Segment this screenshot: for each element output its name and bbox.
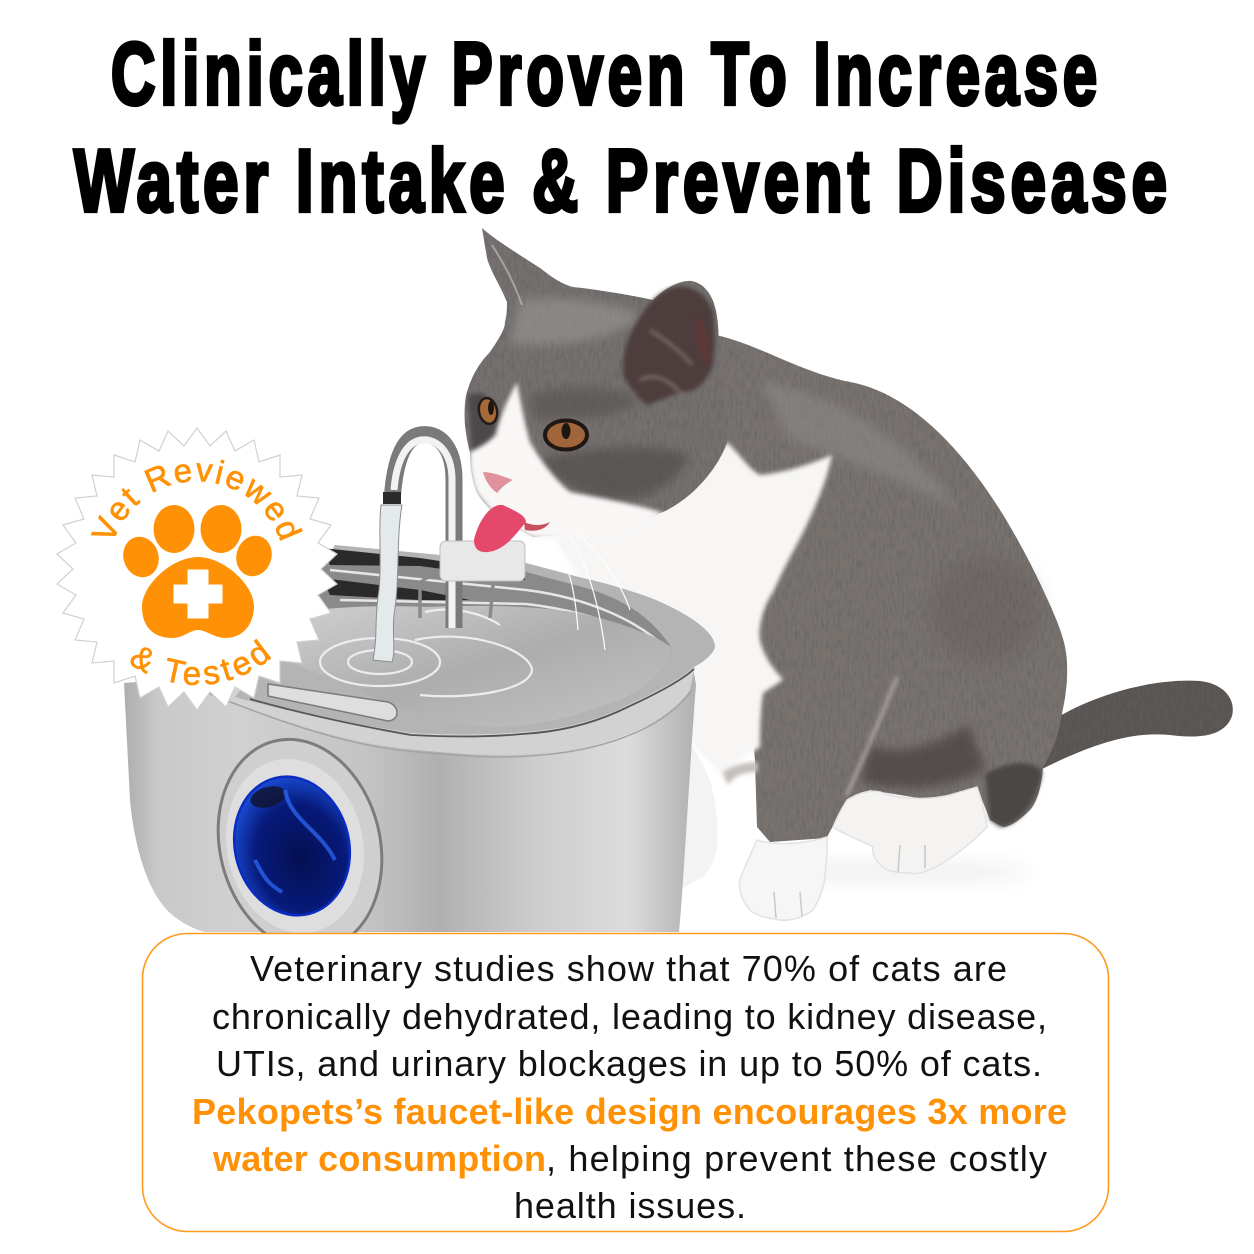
inner wall [300,553,671,667]
faucet [392,435,454,628]
badge text top: Vet Reviewed [90,460,303,541]
white face blaze and muzzle [470,382,663,540]
front white paw [739,837,827,920]
cat tail [1040,681,1233,770]
mouth gums [524,522,550,531]
callout text: Pekopets’s faucet-like design encourages 3x more [192,1091,1067,1132]
left ear highlight [492,245,522,305]
rim shine line [250,669,694,736]
water surface [285,606,671,727]
cat head [465,228,727,537]
eye mask shade left [468,393,500,452]
callout text: health issues. [514,1185,746,1226]
cat body [700,335,1067,842]
window bezel [196,722,404,968]
inner dark stripes [322,548,525,600]
faucet base loop [420,574,493,618]
badge text bottom: & Tested [130,638,272,686]
ground shadow [770,860,1030,884]
paw toe lines [774,845,925,918]
faucet highlight [394,440,452,628]
brow shade [530,388,640,420]
haunch upper shade [930,555,1040,665]
white chest [550,442,832,773]
rear dark flank [985,763,1042,827]
starburst seal [57,428,337,710]
faucet tip [383,492,401,504]
ear inner highlight [640,330,692,392]
leg crease highlight [847,677,897,795]
fountain body [124,650,696,932]
inner ledge lines [330,570,668,650]
water ripples [320,610,532,696]
whiskers [555,530,630,650]
blue water level window [220,764,364,928]
left eye [476,396,500,426]
badge: vet reviewed and tested [56,427,338,709]
callout text [192,948,1067,1226]
callout text: Veterinary studies show that 70% of cats are [250,948,1007,989]
band below rim [200,640,695,755]
tongue [474,505,526,552]
cat photo illustration [465,228,1233,920]
cheek dark shade [540,447,690,500]
ear deep maroon [695,315,709,365]
right ear inner [623,286,715,405]
water stream [373,505,402,662]
rear white paw [833,787,987,874]
callout panel [142,934,1108,1232]
band lower line [205,690,692,757]
far white foreleg [670,747,718,890]
paw icon [118,505,277,638]
forehead light fur [510,299,640,345]
fountain [124,435,715,968]
haunch lower shade [860,725,985,788]
rim [235,545,715,734]
white block [440,541,525,581]
window dark top [248,783,288,811]
window reflection [255,790,335,892]
callout text: , helping prevent these costly [546,1138,1047,1179]
callout text: UTIs, and urinary blockages in up to 50% of cats. [216,1043,1042,1084]
back highlight [760,380,960,510]
callout text: water consumption [212,1138,546,1179]
window inner ring [210,746,380,946]
front slot [268,684,397,721]
callout box [142,934,1108,1232]
right eye [545,420,587,450]
title [74,24,1172,230]
nose [483,472,513,493]
under chest shadow [722,762,758,785]
callout text: chronically dehydrated, leading to kidney disease, [212,996,1047,1037]
